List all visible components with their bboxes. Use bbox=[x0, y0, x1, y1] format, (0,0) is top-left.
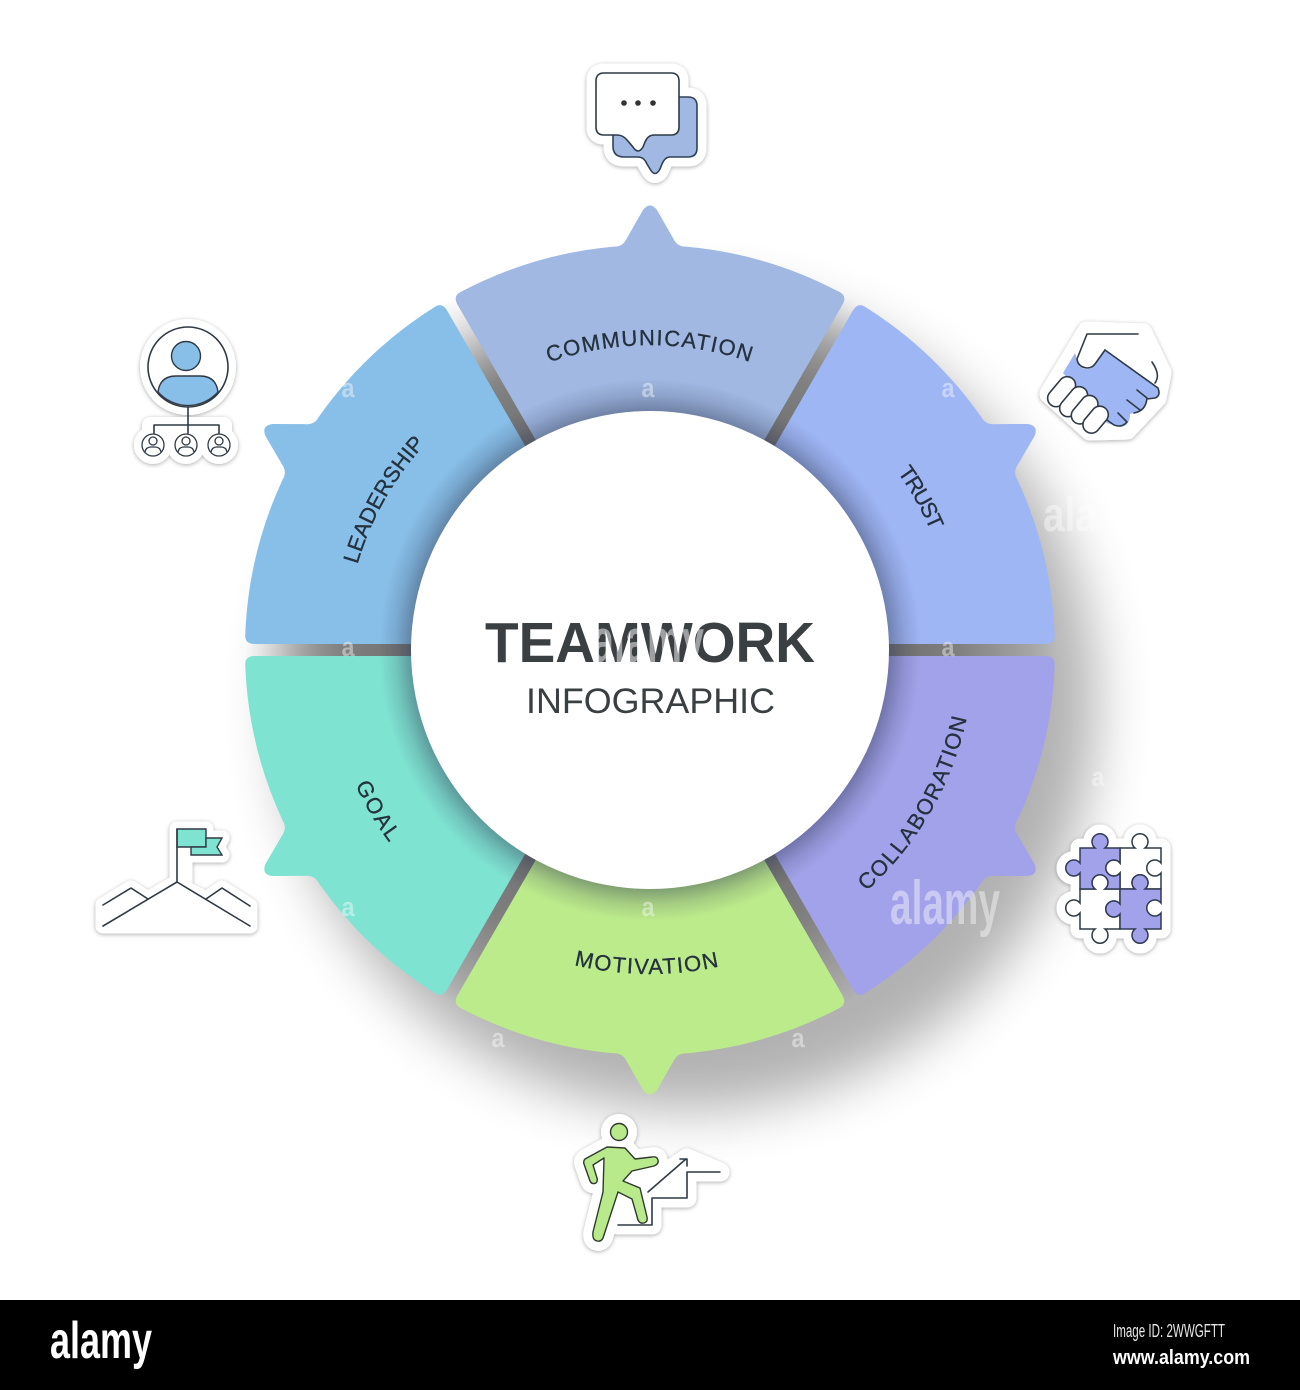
icon: runner on stairs bbox=[584, 1124, 720, 1241]
panel: motivation bbox=[456, 860, 844, 1094]
segment: communication bbox=[456, 206, 844, 452]
watermarks: a bbox=[942, 632, 955, 662]
segment: collaboration bbox=[724, 581, 1132, 1041]
watermark over title: alamy bbox=[592, 607, 704, 676]
panel: trust bbox=[774, 305, 1055, 644]
panel: communication bbox=[456, 206, 844, 440]
watermarks: a bbox=[492, 1023, 505, 1053]
label: goal: GOAL bbox=[358, 781, 397, 842]
inner shadow from centre disc bbox=[379, 379, 921, 921]
label: leadership: LEADERSHIP bbox=[343, 436, 418, 563]
segment: trust bbox=[724, 259, 1132, 719]
panel: collaboration bbox=[774, 656, 1055, 995]
title: TEAMWORK bbox=[485, 611, 815, 675]
footer url: www.alamy.com bbox=[1112, 1347, 1250, 1369]
watermarks: ala bbox=[1043, 489, 1097, 542]
icon: flag on mountain bbox=[103, 829, 250, 926]
watermarks bbox=[342, 373, 1105, 1053]
icon: handshake bbox=[1044, 331, 1162, 437]
ring gap shading bbox=[245, 245, 1055, 1055]
watermarks: a bbox=[792, 1023, 805, 1053]
icon: speech bubbles bbox=[596, 73, 697, 174]
watermarks: a bbox=[342, 632, 355, 662]
footer band bbox=[0, 1300, 1300, 1390]
icon: leadership hierarchy bbox=[142, 327, 230, 456]
panel: leadership bbox=[245, 305, 526, 644]
watermarks: alamy bbox=[890, 869, 1000, 938]
panel: goal bbox=[245, 656, 526, 995]
label: communication: COMMUNICATION bbox=[546, 330, 753, 362]
footer logo: alamy bbox=[50, 1312, 152, 1370]
label: collaboration: COLLABORATION bbox=[859, 716, 966, 888]
footer image id: Image ID: 2WWGFTT bbox=[1113, 1321, 1225, 1341]
watermarks: a bbox=[942, 373, 955, 403]
watermarks: a bbox=[1092, 762, 1105, 792]
ring drop shadow bbox=[280, 294, 1096, 1110]
label: motivation: MOTIVATION bbox=[576, 950, 718, 974]
centre disc bbox=[411, 411, 889, 889]
watermarks: a bbox=[342, 892, 355, 922]
icon: puzzle bbox=[1066, 834, 1161, 944]
segment: motivation bbox=[456, 848, 844, 1094]
subtitle: INFOGRAPHIC bbox=[526, 682, 775, 721]
segment: goal bbox=[168, 581, 576, 1041]
label: trust: TRUST bbox=[900, 464, 944, 526]
segment: leadership bbox=[168, 259, 576, 719]
watermarks: a bbox=[642, 373, 655, 403]
watermarks: a bbox=[342, 373, 355, 403]
watermarks: a bbox=[642, 892, 655, 922]
